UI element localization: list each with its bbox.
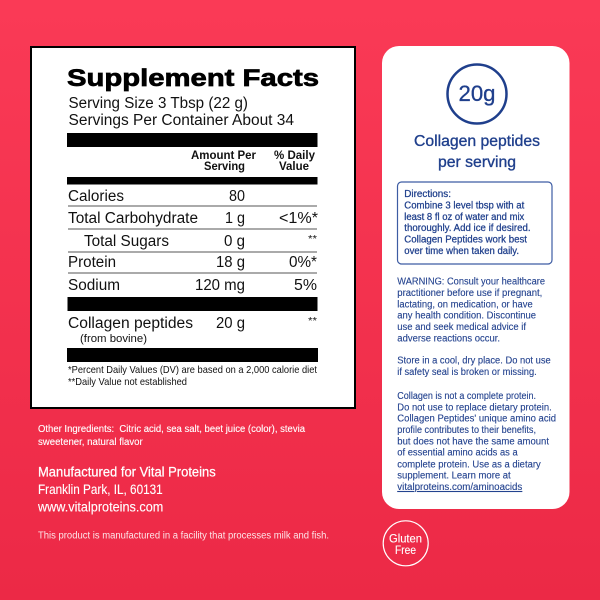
callout: directions: [398, 182, 552, 264]
row: protein: 0%*: [289, 254, 317, 271]
text: manufacturer details: Manufactured for Vital Proteins: [38, 464, 216, 479]
text: storage: [397, 356, 551, 378]
row: collagen peptides: Collagen peptides: [68, 315, 193, 332]
heading: collagen peptides per serving: Collagen peptides: [414, 133, 540, 150]
text: allergen facility note: This product is manufactured in a facility that processes milk and fish.: [38, 531, 329, 542]
nutrient rows: [68, 188, 318, 294]
footnotes: **Daily Value not established: [68, 376, 187, 388]
row: protein: 18 g: [216, 254, 245, 271]
black bar: above collagen: [68, 297, 318, 311]
serving information: Serving Size 3 Tbsp (22 g): [68, 95, 248, 112]
text: collagen protein note: profile contributes to their benefits,: [397, 425, 536, 436]
serving information: Servings Per Container About 34: [68, 112, 294, 129]
text: collagen protein note: [397, 391, 556, 493]
row: sodium: 120 mg: [195, 277, 245, 294]
callout: directions: Combine 3 level tbsp with at: [404, 201, 525, 212]
badge: gluten free: [383, 521, 428, 566]
row: total sugars: Total Sugars: [84, 233, 169, 250]
callout: directions: least 8 fl oz of water and mix: [404, 212, 524, 223]
row: calories: Calories: [68, 188, 124, 205]
text: warning: adverse reactions occur.: [397, 333, 500, 344]
text: warning: any health condition. Discontinue: [397, 310, 536, 322]
black bar: under headers: [67, 177, 318, 184]
heading: collagen peptides per serving: [414, 133, 540, 171]
column headers: Value: [279, 161, 309, 173]
text: warning: WARNING: Consult your healthcare: [397, 276, 545, 287]
column headers: Serving: [204, 161, 245, 173]
row: total carbohydrate: 1 g: [225, 210, 245, 227]
row: total sugars: 0 g: [224, 233, 245, 250]
row: collagen peptides: 20 g: [216, 315, 245, 332]
text: collagen protein note: Do not use to replace dietary protein.: [397, 402, 552, 413]
text: collagen protein note: Collagen Peptides' unique amino acid: [397, 414, 556, 425]
badge: gluten free: Free: [395, 545, 416, 557]
callout: directions: over time when taken daily.: [404, 246, 519, 257]
row: calories: [68, 188, 245, 205]
badge: 20g: [448, 64, 506, 124]
row: collagen peptides: **: [308, 316, 317, 327]
footnotes: [68, 364, 317, 388]
text: collagen protein note: Collagen is not a complete protein.: [397, 391, 536, 402]
text: manufacturer details: www.vitalproteins.com: [37, 500, 163, 515]
text: warning: [397, 276, 545, 344]
row: total sugars: **: [308, 234, 317, 245]
text: warning: use and seek medical advice if: [397, 322, 526, 333]
row: sodium: Sodium: [68, 277, 120, 294]
heading: collagen peptides per serving: per serving: [438, 154, 516, 171]
text: collagen protein note: vitalproteins.com/aminoacids: [397, 482, 522, 493]
text: manufacturer details: Franklin Park, IL, 60131: [38, 482, 163, 497]
text: warning: lactating, on medication, or have: [397, 299, 533, 310]
row: sodium: [68, 277, 317, 294]
row: collagen peptides: (from bovine): [80, 333, 147, 345]
text: other ingredients: Other Ingredients: Citric acid, sea salt, beet juice (color), stevia: [38, 424, 305, 435]
footnotes: *Percent Daily Values (DV) are based on a 2,000 calorie diet: [68, 364, 317, 376]
callout: directions: Directions:: [404, 189, 451, 200]
serving information: [68, 95, 294, 129]
text: other ingredients: [38, 424, 305, 448]
column headers: [191, 150, 316, 173]
row: total carbohydrate: Total Carbohydrate: [68, 210, 198, 227]
text: manufacturer details: [37, 464, 216, 515]
row: sodium: 5%: [294, 277, 317, 294]
text: other ingredients: sweetener, natural flavor: [38, 437, 143, 448]
text: collagen protein note: complete protein. Use as a dietary: [397, 459, 541, 470]
row: calories: 80: [229, 188, 245, 205]
row: protein: Protein: [68, 254, 116, 271]
row: protein: [68, 254, 317, 271]
row: total sugars: [84, 233, 317, 250]
row: collagen peptides: [68, 315, 317, 345]
column headers: % Daily: [274, 150, 316, 162]
callout: directions: Collagen Peptides work best: [404, 235, 527, 246]
callout: directions: thoroughly. Add ice if desired.: [404, 223, 531, 234]
row: total carbohydrate: <1%*: [279, 210, 318, 227]
panel: collagen information card: [382, 46, 570, 509]
badge: 20g: 20g: [458, 81, 496, 106]
black bar: top: [67, 133, 318, 147]
text: storage: Store in a cool, dry place. Do not use: [397, 356, 551, 367]
column headers: Amount Per: [191, 150, 257, 162]
text: collagen protein note: of essential amino acids as a: [397, 448, 518, 459]
text: storage: if safety seal is broken or missing.: [397, 367, 537, 378]
text: collagen protein note: but does not have the same amount: [397, 436, 549, 447]
row dividers: [68, 206, 317, 273]
row: total carbohydrate: [68, 210, 318, 227]
black bar: bottom: [67, 348, 318, 362]
text: warning: practitioner before use if pregnant,: [397, 288, 542, 299]
heading: Supplement Facts: Supplement Facts: [67, 65, 319, 92]
text: collagen protein note: supplement. Learn more at: [397, 471, 511, 482]
panel: supplement facts label: [31, 47, 355, 408]
badge: gluten free: Gluten: [389, 533, 422, 545]
